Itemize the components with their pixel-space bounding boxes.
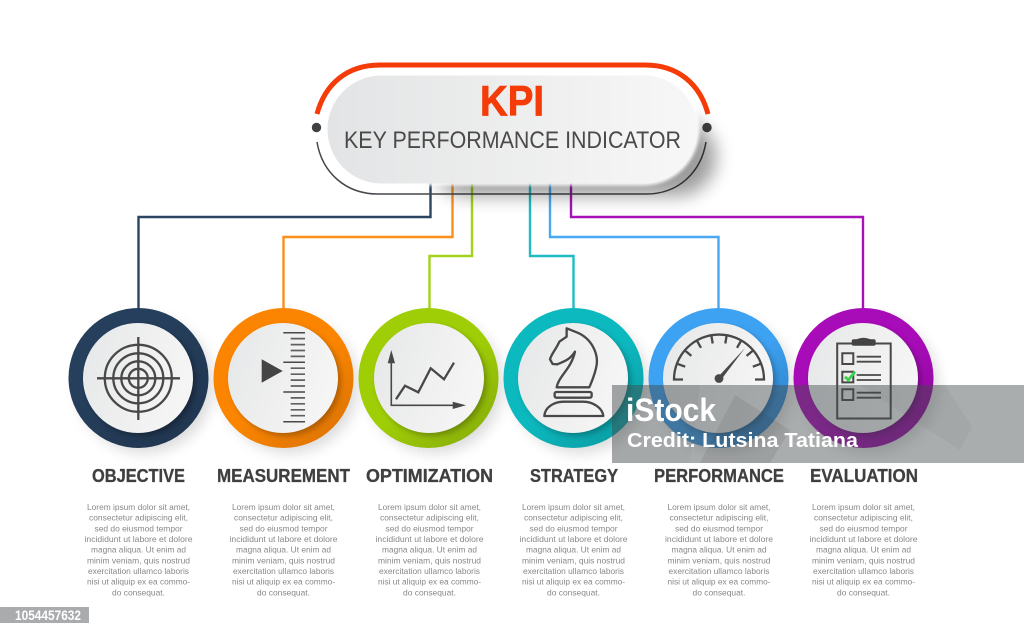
body text: optimization: do consequat. — [403, 587, 456, 597]
body text: strategy: minim veniam, quis nostrud — [522, 555, 625, 565]
body text: optimization: magna aliqua. Ut enim ad — [382, 545, 477, 555]
body text: evaluation: do consequat. — [837, 587, 890, 597]
body text: performance: do consequat. — [692, 587, 746, 597]
item: measurement circle — [214, 308, 358, 453]
watermark banner — [612, 385, 1024, 463]
body text: evaluation: magna aliqua. Ut enim ad — [816, 545, 911, 555]
pill body — [328, 76, 698, 184]
heading: evaluation: EVALUATION — [810, 466, 918, 486]
body text: performance: exercitation ullamco laboris — [668, 566, 770, 576]
body text: objective: exercitation ullamco laboris — [88, 566, 189, 576]
body text: evaluation: minim veniam, quis nostrud — [812, 555, 915, 565]
body text: evaluation — [810, 502, 918, 597]
icon: speedometer gauge — [674, 335, 764, 383]
watermark logo: iStock — [626, 392, 716, 428]
connector: evaluation — [571, 183, 863, 312]
connector: objective — [138, 183, 430, 312]
body text: measurement: magna aliqua. Ut enim ad — [236, 545, 331, 555]
left dot — [312, 123, 321, 132]
body text: optimization: sed do eiusmod tempor — [386, 523, 474, 533]
body text: measurement: sed do eiusmod tempor — [240, 523, 328, 533]
body text: objective: incididunt ut labore et dolore — [84, 534, 193, 544]
body text: objective — [84, 502, 193, 597]
icon: target — [97, 337, 180, 420]
connector: optimization — [430, 183, 472, 312]
body text: performance: incididunt ut labore et dolore — [665, 534, 773, 544]
column: strategy — [520, 466, 628, 597]
body text: evaluation: exercitation ullamco laboris — [813, 566, 914, 576]
subtitle: KEY PERFORMANCE INDICATOR — [344, 127, 681, 154]
body text: performance — [665, 502, 773, 597]
body text: measurement: do consequat. — [257, 587, 310, 597]
item: performance circle — [648, 308, 793, 453]
heading: strategy: STRATEGY — [530, 466, 618, 486]
body text: optimization: incididunt ut labore et dolore — [376, 534, 484, 544]
column: objective — [84, 466, 193, 597]
dark bottom arc — [317, 142, 706, 194]
body text: evaluation: Lorem ipsum dolor sit amet, — [812, 502, 915, 512]
body text: strategy: exercitation ullamco laboris — [523, 566, 624, 576]
body text: measurement: exercitation ullamco laboris — [233, 566, 334, 576]
body text: optimization: consectetur adipiscing elit, — [380, 513, 479, 523]
heading: measurement: MEASUREMENT — [217, 466, 350, 486]
item: evaluation circle — [794, 308, 938, 453]
body text: optimization — [376, 502, 484, 597]
item: objective circle — [68, 308, 213, 453]
connector: strategy — [530, 183, 574, 312]
watermark credit: Credit: Lutsina Tatiana — [627, 430, 859, 452]
heading: objective: OBJECTIVE — [92, 466, 185, 486]
image id badge: 1054457632 — [15, 608, 81, 623]
body text: strategy: incididunt ut labore et dolore — [520, 534, 628, 544]
body text: objective: minim veniam, quis nostrud — [87, 555, 190, 565]
body text: performance: consectetur adipiscing elit, — [670, 513, 768, 523]
heading: performance: PERFORMANCE — [654, 466, 784, 486]
body text: measurement — [230, 502, 338, 597]
body text: performance: sed do eiusmod tempor — [675, 523, 763, 533]
body text: strategy: do consequat. — [547, 587, 600, 597]
body text: performance: nisi ut aliquip ex ea commo- — [668, 577, 771, 587]
body text: measurement: minim veniam, quis nostrud — [232, 555, 335, 565]
body text: measurement: Lorem ipsum dolor sit amet, — [232, 502, 335, 512]
column: optimization — [366, 466, 493, 597]
pill white halo — [326, 74, 700, 186]
header: KPI pill — [312, 65, 716, 196]
item: optimization circle — [358, 308, 503, 453]
icon: chess knight — [544, 328, 603, 416]
body text: evaluation: sed do eiusmod tempor — [820, 523, 908, 533]
body text: strategy: nisi ut aliquip ex ea commo- — [522, 577, 625, 587]
body text: evaluation: incididunt ut labore et dolore — [810, 534, 918, 544]
body text: objective: nisi ut aliquip ex ea commo- — [87, 577, 190, 587]
body text: measurement: nisi ut aliquip ex ea commo- — [232, 577, 335, 587]
body text: strategy: sed do eiusmod tempor — [530, 523, 618, 533]
KPI title: KPI — [480, 78, 544, 126]
red top arc — [317, 65, 708, 114]
body text: performance: magna aliqua. Ut enim ad — [672, 545, 767, 555]
body text: objective: Lorem ipsum dolor sit amet, — [87, 502, 190, 512]
body text: objective: magna aliqua. Ut enim ad — [91, 545, 186, 555]
heading: optimization: OPTIMIZATION — [366, 466, 493, 486]
body text: strategy — [520, 502, 628, 597]
icon: ruler with pointer — [262, 333, 305, 422]
body text: optimization: exercitation ullamco laboris — [379, 566, 480, 576]
pill shadow — [430, 118, 716, 196]
connector lines — [138, 183, 863, 312]
body text: measurement: consectetur adipiscing elit, — [234, 513, 333, 523]
body text: performance: Lorem ipsum dolor sit amet, — [668, 502, 770, 512]
column: evaluation — [810, 466, 918, 597]
body text: strategy: consectetur adipiscing elit, — [524, 513, 623, 523]
body text: measurement: incididunt ut labore et dolore — [230, 534, 338, 544]
body text: objective: do consequat. — [112, 587, 165, 597]
body text: optimization: nisi ut aliquip ex ea commo- — [378, 577, 481, 587]
connector: measurement — [284, 183, 452, 312]
body text: objective: consectetur adipiscing elit, — [89, 513, 188, 523]
item: strategy circle — [504, 308, 648, 453]
body text: evaluation: nisi ut aliquip ex ea commo- — [812, 577, 915, 587]
body text: performance: minim veniam, quis nostrud — [668, 555, 771, 565]
body text: objective: sed do eiusmod tempor — [94, 523, 183, 533]
column: measurement — [217, 466, 350, 597]
icon: line chart — [388, 350, 466, 409]
body text: evaluation: consectetur adipiscing elit, — [814, 513, 913, 523]
body text: optimization: minim veniam, quis nostrud — [378, 555, 481, 565]
body text: optimization: Lorem ipsum dolor sit amet, — [378, 502, 481, 512]
body text: strategy: magna aliqua. Ut enim ad — [526, 545, 621, 555]
column: performance — [654, 466, 784, 597]
connector: performance — [550, 183, 718, 312]
right dot — [702, 123, 712, 132]
body text: strategy: Lorem ipsum dolor sit amet, — [522, 502, 625, 512]
icon: clipboard checklist — [837, 338, 891, 418]
